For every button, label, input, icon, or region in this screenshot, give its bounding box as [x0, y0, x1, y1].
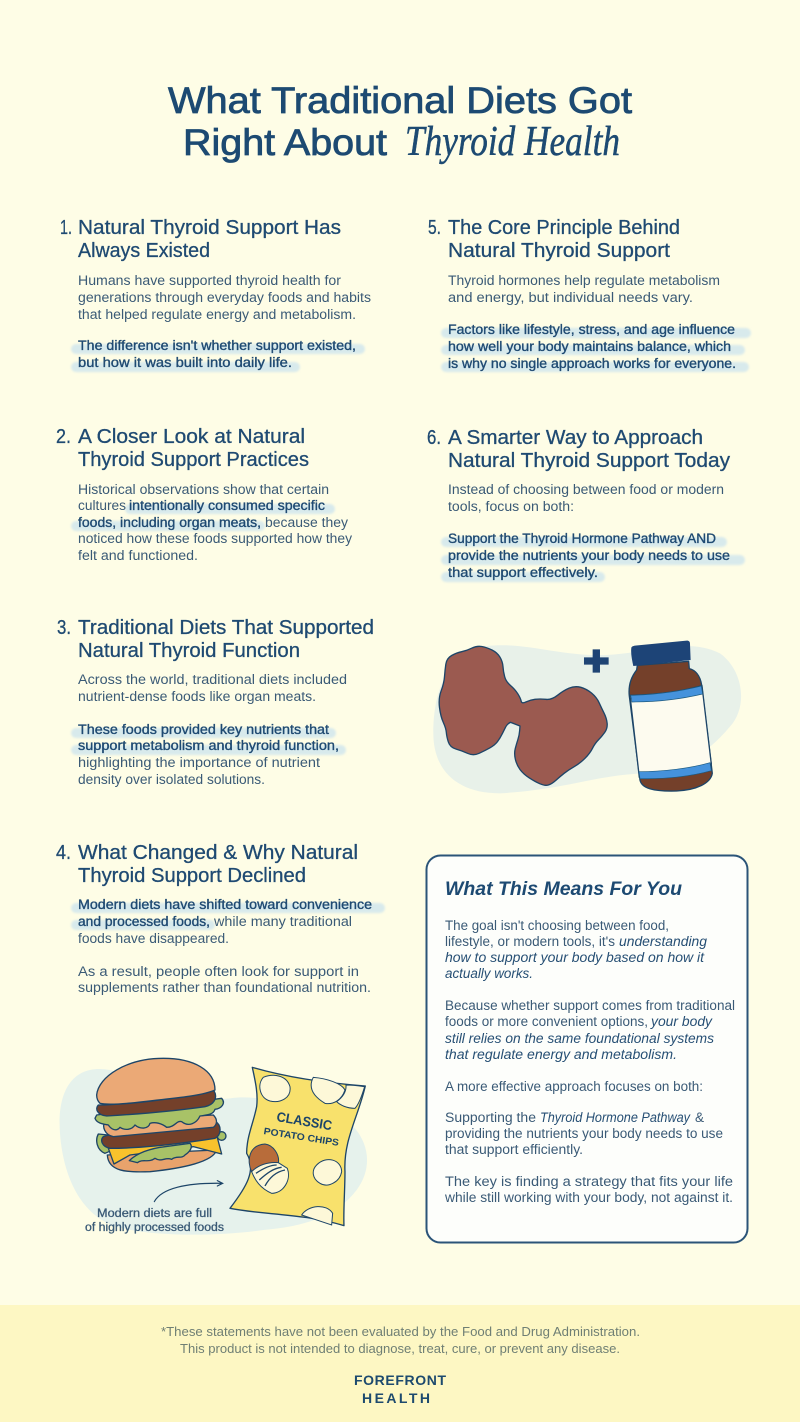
section 3: traditional diets: 3. — [57, 617, 71, 639]
section 4: what changed: Thyroid Support Declined — [78, 865, 306, 887]
logo: forefront health — [354, 1372, 446, 1406]
background blob — [60, 1069, 367, 1235]
section 6: a smarter way: provide the nutrients your body needs to use — [448, 548, 730, 563]
section 5: the core principle: how well your body maintains balance, which — [448, 339, 731, 354]
panel body text: Thyroid Hormone Pathway — [540, 1110, 691, 1125]
section 1: natural thyroid support has always existed: Always Existed — [78, 240, 210, 262]
panel body text: A more effective approach focuses on both: — [445, 1079, 703, 1094]
section 5: the core principle: Thyroid hormones help regulate metabolism — [448, 273, 720, 288]
panel heading: What This Means For You — [445, 879, 682, 900]
section 1: natural thyroid support has always existed: 1. — [60, 217, 72, 239]
illustration caption — [85, 1208, 224, 1234]
icon: plus sign — [584, 649, 609, 673]
section 2: a closer look: Historical observations show that certain — [78, 482, 329, 497]
panel body text: & — [695, 1110, 704, 1125]
section 2: a closer look: Thyroid Support Practices — [78, 449, 309, 471]
illustration: burger and chips — [60, 1058, 367, 1235]
panel body text: that regulate energy and metabolism. — [445, 1047, 677, 1062]
section 4: what changed: What Changed & Why Natural — [78, 842, 358, 864]
section 6: a smarter way: Instead of choosing between food or modern — [448, 482, 724, 497]
section 6: a smarter way: that support effectively. — [448, 565, 598, 580]
section 3: traditional diets: nutrient-dense foods like organ meats. — [78, 689, 316, 704]
panel body text: how to support your body based on how it — [445, 950, 705, 965]
section 3: traditional diets: highlighting the importance of nutrient — [78, 755, 320, 770]
section 3: traditional diets: Natural Thyroid Function — [78, 640, 300, 662]
panel body text: Because whether support comes from traditional — [445, 998, 735, 1013]
panel body text: that support efficiently. — [445, 1142, 583, 1157]
section 6: a smarter way: A Smarter Way to Approach — [448, 427, 703, 449]
section 1: natural thyroid support has always existed — [60, 217, 371, 370]
section 2: a closer look: cultures — [78, 498, 126, 513]
section 5: the core principle: Natural Thyroid Support — [448, 240, 670, 262]
section 4: what changed: 4. — [56, 842, 71, 864]
panel body text: The key is finding a strategy that fits your life — [445, 1174, 733, 1189]
section 4: what changed: Modern diets have shifted toward convenience — [78, 897, 372, 912]
section 4: what changed: As a result, people often look for support in — [78, 964, 359, 979]
section 6: a smarter way — [427, 427, 740, 580]
icon: thyroid gland — [439, 646, 607, 785]
section 1: natural thyroid support has always existed: but how it was built into daily life. — [78, 355, 292, 370]
section 3: traditional diets: Across the world, traditional diets included — [78, 672, 347, 687]
disclaimer: *These statements have not been evaluated by the Food and Drug Administration. — [161, 1324, 640, 1339]
icon: supplement bottle — [629, 641, 712, 791]
section 2: a closer look: because they — [265, 515, 348, 530]
disclaimer: This product is not intended to diagnose, treat, cure, or prevent any disease. — [180, 1341, 620, 1356]
section 3: traditional diets: support metabolism and thyroid function, — [78, 738, 339, 753]
section 3: traditional diets: density over isolated solutions. — [78, 772, 265, 787]
chip bag label — [263, 1109, 340, 1149]
section 2: a closer look: noticed how these foods supported how they — [78, 531, 352, 546]
panel body text: still relies on the same foundational systems — [445, 1031, 714, 1046]
panel: what this means for you — [426, 856, 748, 1242]
panel body text: your body — [650, 1014, 713, 1029]
chip bag label: POTATO CHIPS — [263, 1126, 340, 1149]
title: Thyroid Health — [405, 119, 620, 165]
section 5: the core principle: The Core Principle Behind — [448, 217, 680, 239]
section 1: natural thyroid support has always existed: generations through everyday foods and habits — [78, 290, 371, 305]
illustration: thyroid plus supplement bottle — [433, 641, 741, 793]
section 4: what changed: supplements rather than foundational nutrition. — [78, 980, 371, 995]
section 5: the core principle: Factors like lifestyle, stress, and age influence — [448, 322, 735, 337]
section 6: a smarter way: Natural Thyroid Support Today — [448, 450, 730, 472]
section 4: what changed: foods have disappeared. — [78, 931, 229, 946]
section 5: the core principle: and energy, but individual needs vary. — [448, 290, 693, 305]
section 1: natural thyroid support has always existed: The difference isn't whether support existed, — [78, 338, 356, 353]
section 5: the core principle — [428, 217, 746, 371]
section 4: what changed: while many traditional — [213, 914, 352, 929]
section 1: natural thyroid support has always existed: Humans have supported thyroid health for — [78, 273, 342, 288]
section 3: traditional diets: Traditional Diets That Supported — [78, 617, 374, 639]
section 2: a closer look: A Closer Look at Natural — [78, 426, 305, 448]
section 4: what changed — [56, 842, 380, 995]
panel body text: foods or more convenient options, — [445, 1014, 648, 1029]
panel body text: Supporting the — [445, 1110, 536, 1125]
logo: forefront health: FOREFRONT — [354, 1372, 446, 1388]
section 1: natural thyroid support has always existed: that helped regulate energy and metabolism. — [78, 307, 356, 322]
section 2: a closer look: foods, including organ meats, — [78, 515, 261, 530]
icon: burger — [95, 1058, 226, 1172]
disclaimer — [161, 1324, 640, 1356]
section 2: a closer look: felt and functioned. — [78, 548, 198, 563]
section 6: a smarter way: tools, focus on both: — [448, 499, 574, 514]
section 6: a smarter way: 6. — [427, 427, 441, 449]
panel body text: understanding — [619, 934, 707, 949]
section 3: traditional diets: These foods provided key nutrients that — [78, 722, 329, 737]
panel body text: while still working with your body, not against it. — [444, 1190, 733, 1205]
panel body text: providing the nutrients your body needs to use — [445, 1126, 723, 1141]
panel body text: lifestyle, or modern tools, it's — [445, 934, 615, 949]
chip bag label: CLASSIC — [275, 1109, 333, 1133]
title: Right About — [183, 122, 388, 163]
icon: potato chip bag — [230, 1067, 365, 1226]
section 2: a closer look: intentionally consumed specific — [129, 498, 325, 513]
background blob — [433, 645, 741, 793]
section 5: the core principle: is why no single approach works for everyone. — [448, 356, 736, 371]
title: What Traditional Diets Got — [168, 80, 633, 121]
footer — [0, 1305, 800, 1422]
arrow — [154, 1181, 223, 1202]
logo: forefront health: HEALTH — [362, 1390, 430, 1406]
section 5: the core principle: 5. — [428, 217, 441, 239]
panel body text: actually works. — [445, 966, 533, 981]
illustration caption: of highly processed foods — [85, 1222, 224, 1234]
section 2: a closer look: 2. — [56, 426, 71, 448]
section 4: what changed: and processed foods, — [78, 914, 210, 929]
illustration caption: Modern diets are full — [97, 1208, 212, 1220]
section 1: natural thyroid support has always existed: Natural Thyroid Support Has — [78, 217, 341, 239]
section 2: a closer look — [56, 426, 352, 563]
panel body text — [444, 918, 735, 1205]
title — [168, 80, 633, 165]
panel body text: The goal isn't choosing between food, — [445, 918, 669, 933]
section 6: a smarter way: Support the Thyroid Hormone Pathway AND — [448, 531, 716, 546]
section 3: traditional diets — [57, 617, 374, 787]
